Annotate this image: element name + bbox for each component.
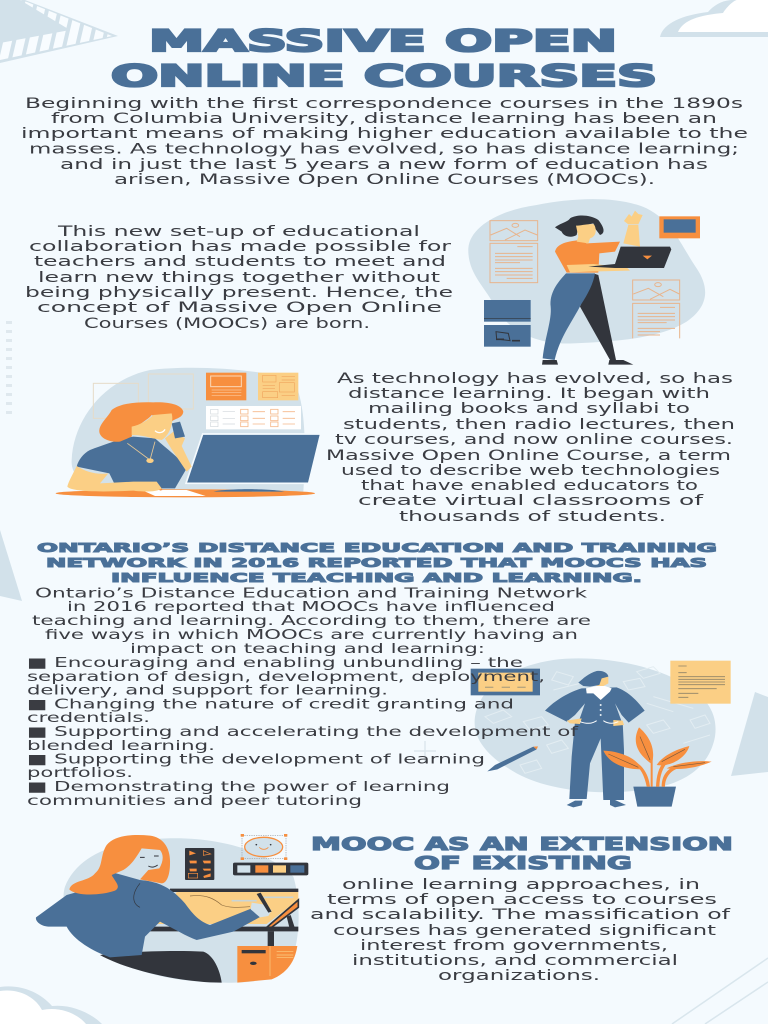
title: ONLINE COURSES bbox=[111, 59, 657, 93]
bullet list: ■ Supporting and accelerating the development of bbox=[27, 725, 578, 740]
paragraph: technology evolved bbox=[326, 370, 735, 525]
decoration: triangle left bbox=[0, 530, 22, 601]
blue panels bbox=[484, 300, 531, 347]
illustration: woman on phone at monitor bbox=[56, 368, 321, 497]
decoration: triangle right bbox=[731, 692, 768, 776]
decoration: cloud white top right bbox=[678, 0, 768, 32]
faint checklist pattern bbox=[485, 667, 710, 773]
intro paragraph: important means of making higher education available to the bbox=[21, 125, 748, 142]
pencil bbox=[487, 746, 538, 771]
paragraph: technology evolved: distance learning. It began with bbox=[348, 385, 710, 402]
intro paragraph: from Columbia University, distance learning has been an bbox=[51, 110, 717, 127]
bullet list: delivery, and support for learning. bbox=[27, 684, 388, 698]
title: MASSIVE OPEN bbox=[149, 24, 617, 58]
orange document bbox=[206, 373, 246, 400]
bullet list: ■ Demonstrating the power of learning bbox=[27, 780, 450, 795]
decoration: dotted column left bbox=[6, 321, 12, 414]
decoration: striped triangle top left bbox=[0, 0, 118, 63]
bullet list: portfolios. bbox=[27, 766, 133, 781]
decoration: cloud bottom left bbox=[0, 986, 102, 1024]
yellow document bbox=[258, 373, 298, 400]
heading: Ontario network: INFLUENCE TEACHING AND LEARNING. bbox=[111, 570, 642, 585]
paragraph: Ontario report: five ways in which MOOCs are currently having an bbox=[45, 628, 578, 643]
paragraph: online learning: online learning approaches, in bbox=[342, 876, 700, 893]
woman in suit bbox=[545, 671, 645, 807]
heading: Ontario network: ONTARIO’S DISTANCE EDUCATION AND TRAINING bbox=[37, 540, 717, 555]
decoration: lines bottom right bbox=[672, 958, 768, 1024]
paragraph: online learning: institutions, and commercial bbox=[352, 952, 678, 969]
decoration: cloud top right bbox=[660, 0, 768, 37]
paragraph: technology evolved: students, then radio lectures, then bbox=[343, 416, 735, 433]
cabinet details bbox=[242, 946, 293, 976]
paragraph: educational collaboration: Courses (MOOCs) are born. bbox=[84, 315, 370, 332]
bullet list: separation of design, development, deployment, bbox=[27, 670, 545, 685]
bullet list: ■ Encouraging and enabling unbundling – the bbox=[27, 656, 523, 671]
plant bbox=[603, 727, 712, 807]
heading: Ontario network: NETWORK IN 2016 REPORTED THAT MOOCS HAS bbox=[46, 555, 707, 570]
illustration: woman with laptop bbox=[468, 199, 705, 365]
paragraph: technology evolved: Massive Open Online Course, a term bbox=[326, 447, 731, 464]
paragraph: Ontario report: Ontario’s Distance Education and Training Network bbox=[35, 586, 587, 602]
faint frames bbox=[93, 374, 193, 418]
paragraph: educational collaboration: teachers and students to meet and bbox=[34, 253, 446, 270]
background blob bbox=[72, 368, 305, 492]
paragraph: online learning: courses has generated significant bbox=[333, 922, 716, 939]
paragraph: educational collaboration bbox=[25, 223, 453, 332]
white checklist bbox=[206, 406, 301, 429]
document frames bbox=[490, 221, 680, 338]
paper and pencil bbox=[142, 471, 206, 496]
paragraph: Ontario report: impact on teaching and learning: bbox=[130, 642, 485, 657]
illustration: businesswoman with plant bbox=[471, 658, 731, 807]
paragraph: Ontario report: in 2016 reported that MOOCs have influenced bbox=[67, 600, 555, 615]
heading: MOOC extension: OF EXISTING bbox=[414, 854, 632, 874]
designer bbox=[36, 835, 272, 983]
heading: MOOC extension bbox=[311, 835, 733, 874]
title bbox=[111, 24, 657, 93]
illustration: designer at drawing desk bbox=[36, 834, 308, 983]
paragraph: educational collaboration: learn new things together without bbox=[38, 269, 440, 286]
woman bbox=[67, 402, 192, 492]
background blob bbox=[475, 658, 716, 792]
background blob bbox=[468, 199, 705, 343]
paragraph: technology evolved: thousands of students. bbox=[399, 508, 666, 525]
heading: Ontario network bbox=[37, 540, 717, 585]
monitor bbox=[186, 434, 321, 492]
bullet list: communities and peer tutoring bbox=[27, 794, 362, 809]
paragraph: online learning: terms of open access to courses bbox=[327, 891, 717, 908]
bullet list bbox=[27, 656, 578, 809]
paragraph: technology evolved: As technology has evolved, so has bbox=[337, 370, 733, 387]
paragraph: Ontario report bbox=[32, 586, 591, 657]
paragraph: technology evolved: used to describe web technologies bbox=[341, 462, 720, 479]
paragraph: online learning bbox=[310, 876, 731, 984]
paragraph: educational collaboration: This new set-up of educational bbox=[56, 223, 420, 240]
intro paragraph: Beginning with the first correspondence courses in the 1890s bbox=[25, 95, 743, 112]
paragraph: online learning: organizations. bbox=[438, 967, 600, 984]
paragraph: technology evolved: tv courses, and now online courses. bbox=[335, 431, 733, 448]
paragraph: technology evolved: mailing books and syllabi to bbox=[368, 400, 690, 417]
colour swatches bbox=[233, 863, 308, 875]
paragraph: educational collaboration: collaboration has made possible for bbox=[29, 238, 451, 255]
yellow document bbox=[670, 661, 731, 704]
paragraph: online learning: interest from governments, bbox=[360, 937, 668, 954]
orange picture frame bbox=[659, 216, 700, 238]
intro paragraph: and in just the last 5 years a new form of education has bbox=[60, 156, 708, 173]
paragraph: online learning: and scalability. The massification of bbox=[310, 906, 731, 923]
drawing desk bbox=[150, 889, 298, 946]
tool palette bbox=[185, 848, 214, 880]
decoration: faint cross bbox=[414, 741, 436, 762]
person bbox=[542, 211, 671, 365]
heading: MOOC extension: MOOC AS AN EXTENSION bbox=[311, 835, 733, 855]
smiley selection bbox=[241, 834, 287, 860]
bullet list: blended learning. bbox=[27, 739, 215, 754]
cabinet bbox=[237, 946, 297, 983]
blue note with yellow card bbox=[471, 669, 540, 695]
bullet list: credentials. bbox=[27, 711, 150, 726]
paragraph: educational collaboration: being physically present. Hence, the bbox=[25, 284, 453, 301]
intro paragraph bbox=[21, 95, 748, 188]
paragraph: technology evolved: that have enabled educators to bbox=[361, 477, 698, 494]
intro paragraph: arisen, Massive Open Online Courses (MOOCs). bbox=[114, 171, 655, 188]
bullet list: ■ Changing the nature of credit granting and bbox=[27, 698, 514, 712]
intro paragraph: masses. As technology has evolved, so has distance learning; bbox=[29, 140, 739, 158]
paragraph: technology evolved: create virtual classrooms of bbox=[358, 492, 704, 509]
paragraph: Ontario report: teaching and learning. According to them, there are bbox=[32, 614, 591, 629]
background blob bbox=[64, 838, 299, 983]
paragraph: educational collaboration: concept of Massive Open Online bbox=[37, 299, 442, 316]
bullet list: ■ Supporting the development of learning bbox=[27, 752, 485, 768]
desk bbox=[56, 489, 315, 497]
